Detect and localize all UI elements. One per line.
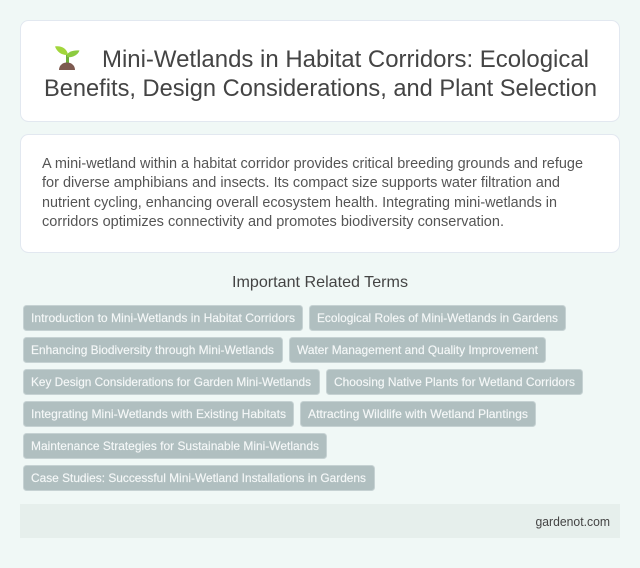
related term tags — [24, 306, 582, 490]
tag — [24, 306, 302, 330]
tag — [24, 370, 320, 394]
tag — [24, 466, 374, 490]
tag: Ecological Roles of Mini-Wetlands in Gardens — [317, 311, 558, 325]
footer: gardenot.com — [536, 514, 610, 529]
tag: Case Studies: Successful Mini-Wetland Installations in Gardens — [31, 471, 366, 485]
description text: A mini-wetland within a habitat corridor provides critical breeding grounds and refuge — [42, 156, 583, 172]
tag: Attracting Wildlife with Wetland Plantings — [308, 407, 528, 421]
panel: description — [20, 134, 620, 252]
tag: Enhancing Biodiversity through Mini-Wetlands — [31, 343, 274, 357]
title text — [44, 46, 597, 102]
title panel — [20, 20, 620, 122]
description text: corridors optimizes connectivity and promotes biodiversity conservation. — [42, 214, 504, 230]
tag: Introduction to Mini-Wetlands in Habitat Corridors — [31, 311, 295, 325]
tag — [326, 370, 582, 394]
tag: Integrating Mini-Wetlands with Existing Habitats — [31, 407, 286, 421]
tag — [24, 338, 282, 362]
tag: Key Design Considerations for Garden Mini-Wetlands — [31, 375, 311, 389]
tag: Choosing Native Plants for Wetland Corridors — [334, 375, 575, 389]
tag — [24, 434, 326, 458]
footer — [20, 504, 620, 538]
tag — [310, 306, 566, 330]
tag: Water Management and Quality Improvement — [297, 343, 539, 357]
tag — [24, 402, 294, 426]
description text: nutrient cycling, enhancing overall ecosystem health. Integrating mini-wetlands in — [42, 195, 557, 211]
icon: seedling — [55, 46, 80, 70]
tag — [300, 402, 536, 426]
description text: for diverse amphibians and insects. Its compact size supports water filtration and — [42, 175, 560, 191]
tag: Maintenance Strategies for Sustainable Mini-Wetlands — [31, 439, 319, 453]
tag — [290, 338, 546, 362]
heading: related terms: Important Related Terms — [232, 274, 408, 291]
title text: Mini-Wetlands in Habitat Corridors: Ecological — [102, 46, 589, 73]
title text: Benefits, Design Considerations, and Plant Selection — [44, 75, 597, 102]
description text — [42, 156, 583, 230]
